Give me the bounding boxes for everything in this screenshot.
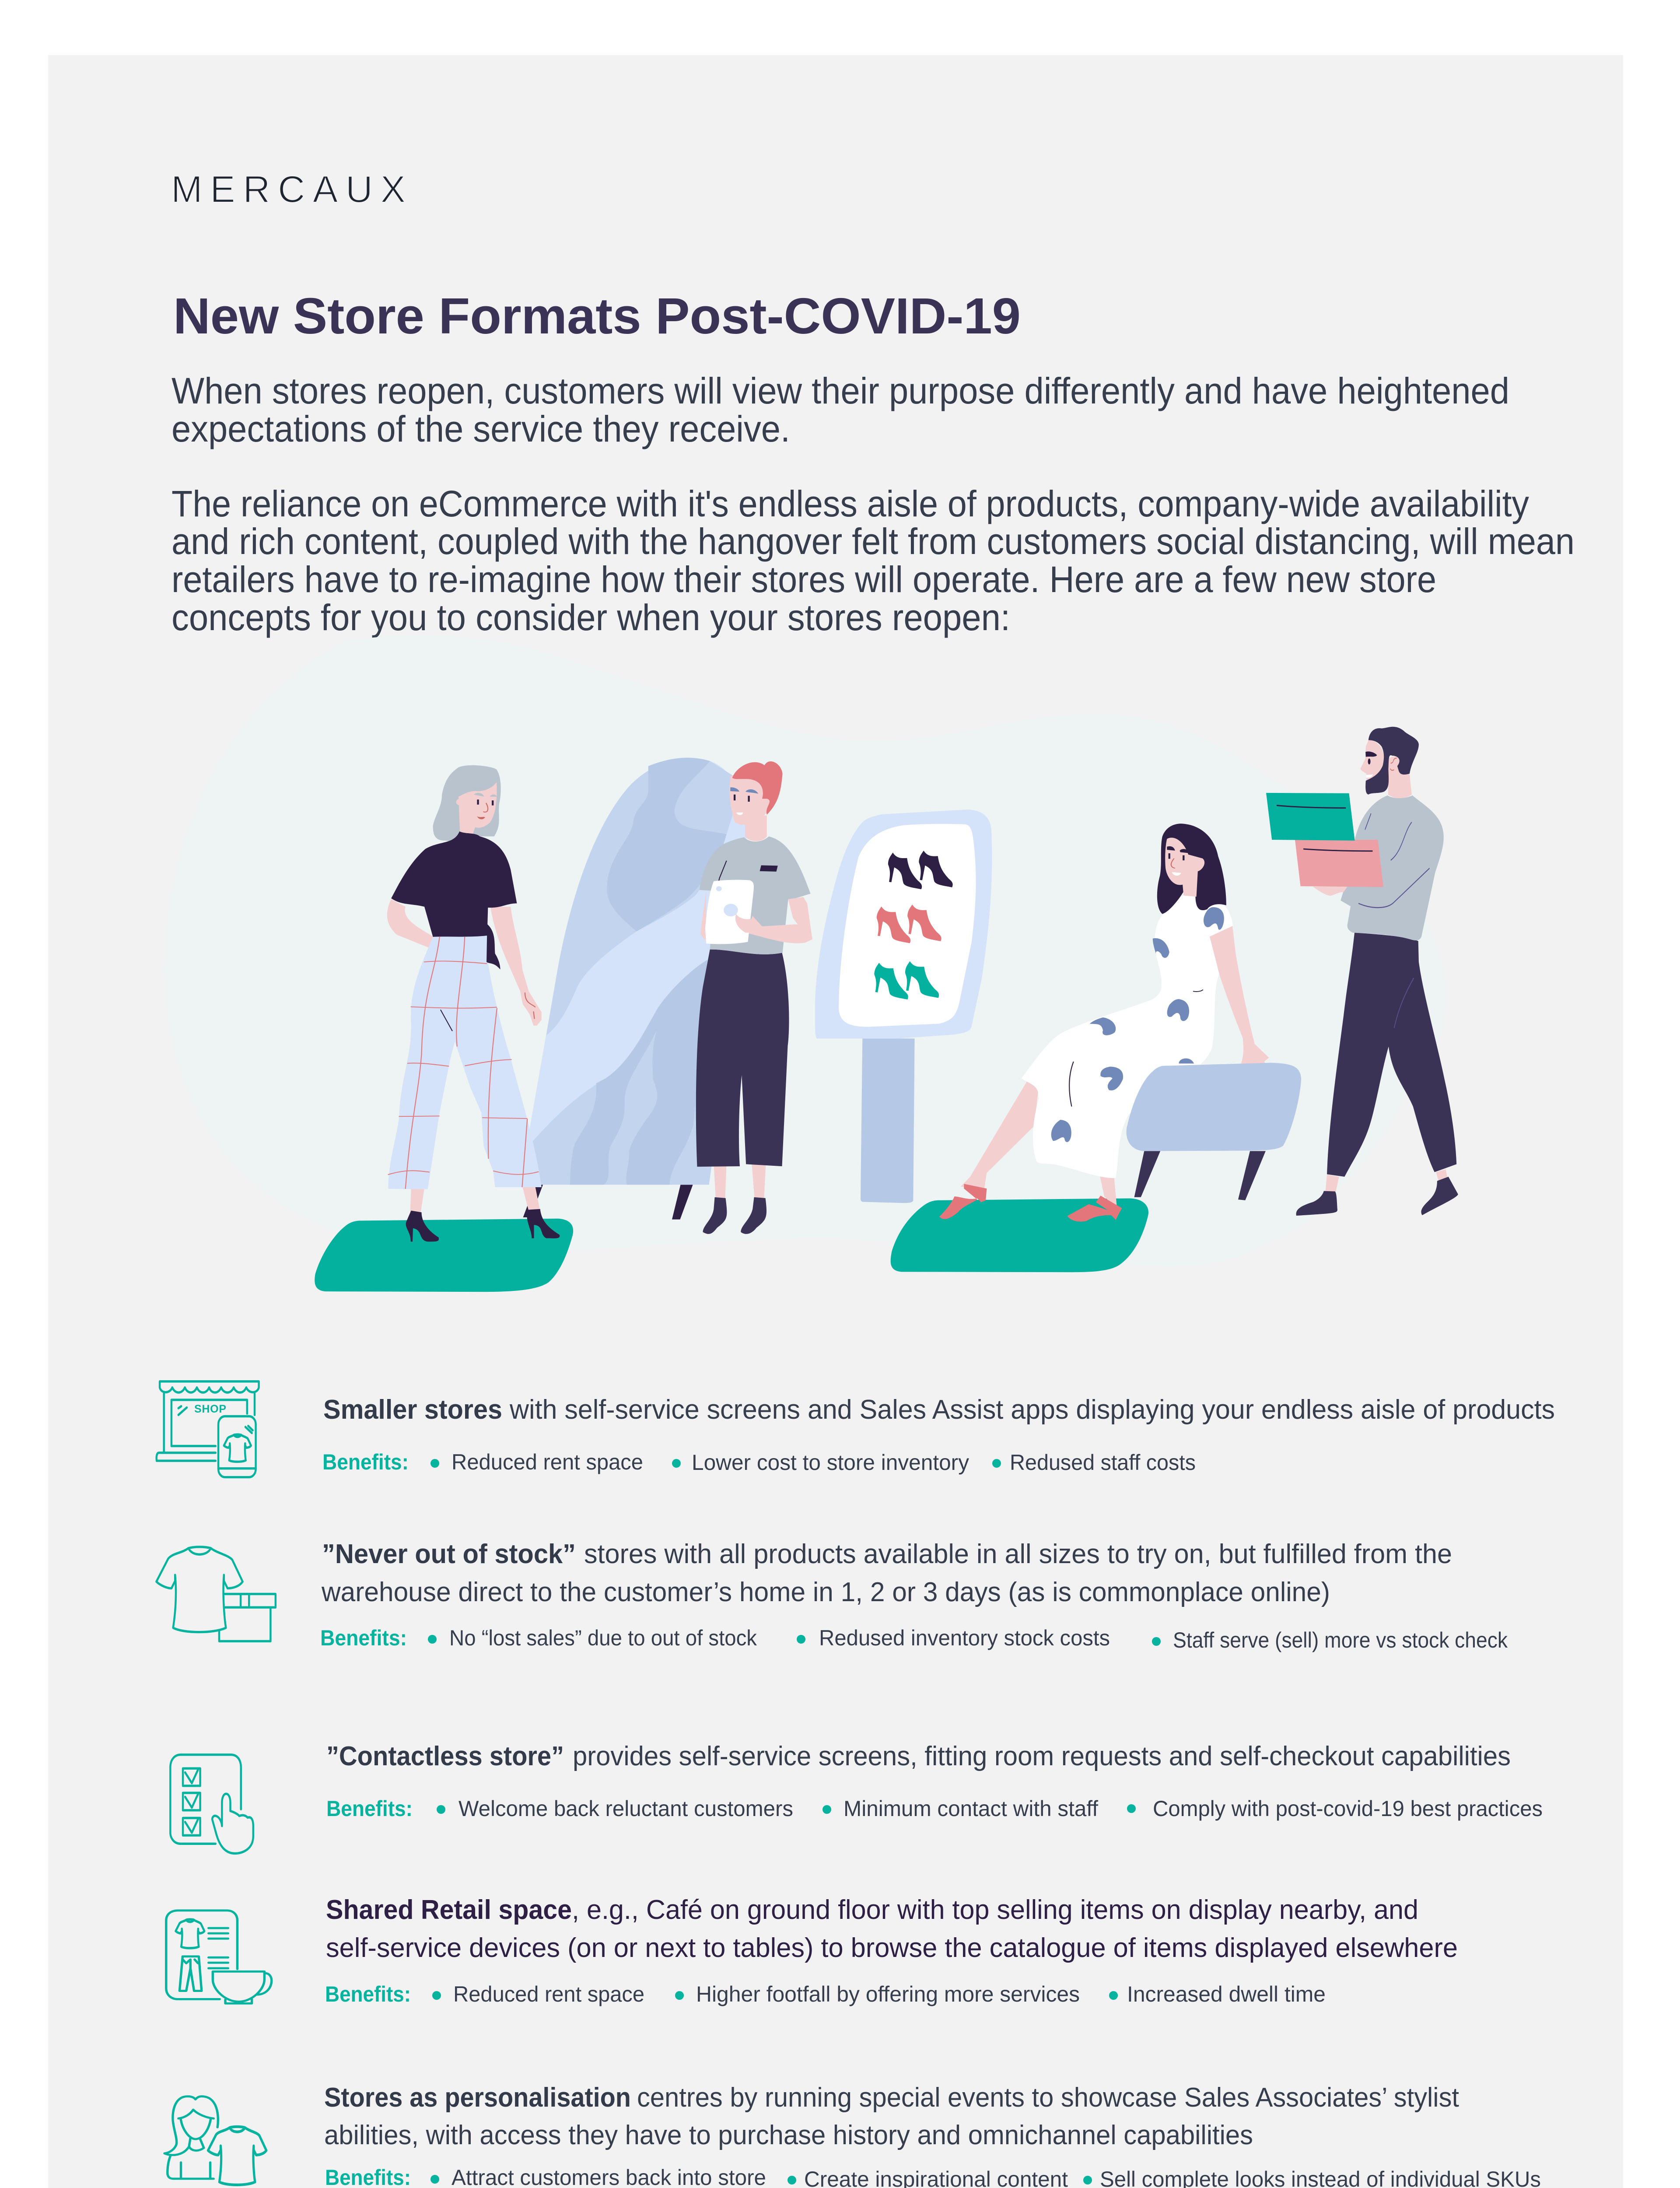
intro text block: and rich content, coupled with the hangover felt from customers social distancing, will mean — [172, 521, 1575, 562]
item 1 benefits: Benefits: — [322, 1450, 409, 1474]
stool — [1127, 1063, 1301, 1200]
item 1 benefits: Redused staff costs — [1010, 1450, 1196, 1475]
item 2 heading text — [321, 1539, 1452, 1607]
intro text block — [172, 370, 1575, 638]
icon: stylist and t-shirt — [164, 2097, 266, 2185]
icon label: SHOP: SHOP — [194, 1403, 226, 1415]
item 3 heading text: provides self-service screens, fitting room requests and self-checkout capabilities — [573, 1741, 1511, 1771]
item 2 heading text: warehouse direct to the customer’s home in 1, 2 or 3 days (as is commonplace online) — [321, 1577, 1330, 1607]
background blob — [164, 635, 1446, 1267]
illustration: store scene — [164, 635, 1458, 1292]
intro text block: The reliance on eCommerce with it's endless aisle of products, company-wide availability — [172, 483, 1529, 524]
sales assistant — [696, 761, 812, 1234]
item 5 heading text: centres by running special events to showcase Sales Associates’ stylist — [637, 2083, 1459, 2113]
item 1 benefits: Reduced rent space — [452, 1450, 643, 1474]
item 2 heading text: ”Never out of stock” — [322, 1539, 576, 1569]
item 3 benefits: Welcome back reluctant customers — [458, 1796, 793, 1821]
intro text block: retailers have to re-imagine how their stores will operate. Here are a few new store — [172, 559, 1436, 600]
item 3 benefits: Minimum contact with staff — [844, 1796, 1098, 1821]
left section: woman and assistant — [315, 757, 812, 1292]
item 4 benefits — [325, 1982, 1326, 2006]
mirror — [527, 757, 748, 1185]
item 4 heading text: , e.g., Café on ground floor with top selling items on display nearby, and — [572, 1895, 1418, 1925]
self-service screen — [815, 810, 992, 1203]
icon: t-shirt and box — [156, 1547, 276, 1641]
intro text block: When stores reopen, customers will view their purpose differently and have heightened — [172, 370, 1509, 411]
icon: catalogue and cup — [166, 1911, 272, 2003]
item 5 benefits — [325, 2165, 1541, 2188]
item 2 heading text: stores with all products available in all sizes to try on, but fulfilled from the — [584, 1539, 1452, 1569]
mirror stands — [523, 1185, 693, 1220]
floor mat left — [315, 1219, 573, 1292]
woman in checked trousers — [387, 765, 560, 1241]
item 3: contactless store — [170, 1741, 1543, 1853]
logo: Mercaux: MERCAUX — [171, 168, 406, 210]
item 4: shared retail space — [166, 1895, 1458, 2006]
item 1 heading text: with self-service screens and Sales Assist apps displaying your endless aisle of products — [509, 1395, 1555, 1425]
item 4 heading text: self-service devices (on or next to tables) to browse the catalogue of items displayed elsewhere — [326, 1933, 1458, 1963]
icon: checklist and hand — [170, 1755, 253, 1853]
item 4 heading text: Shared Retail space — [326, 1895, 572, 1925]
right section: screen, seated woman, stool — [815, 810, 1301, 1272]
item 4 benefits: Higher footfall by offering more services — [696, 1982, 1080, 2006]
item 3 benefits — [326, 1796, 1543, 1821]
item 5: stores as personalisation — [164, 2083, 1541, 2188]
item 2 benefits: No “lost sales” due to out of stock — [449, 1626, 757, 1650]
icon: shop and phone — [157, 1382, 259, 1477]
item 4 benefits: Reduced rent space — [453, 1982, 644, 2006]
item 2 benefits: Redused inventory stock costs — [819, 1626, 1110, 1650]
item 5 heading text: Stores as personalisation — [324, 2083, 631, 2113]
item 5 heading text: abilities, with access they have to purchase history and omnichannel capabilities — [324, 2120, 1253, 2150]
item 4 benefits: Benefits: — [325, 1982, 411, 2006]
item 5 heading text — [324, 2083, 1459, 2150]
item 4 benefits: Increased dwell time — [1127, 1982, 1326, 2006]
intro text block: concepts for you to consider when your stores reopen: — [172, 597, 1010, 638]
item 1: smaller stores — [157, 1382, 1555, 1477]
shoes on screen — [874, 851, 953, 999]
item 2 benefits: Staff serve (sell) more vs stock check — [1173, 1628, 1508, 1652]
floor mat right — [891, 1198, 1148, 1272]
seated woman — [939, 824, 1269, 1222]
item 2 benefits — [320, 1626, 1508, 1652]
item 3 benefits: Comply with post-covid-19 best practices — [1153, 1796, 1543, 1821]
item 3 benefits: Benefits: — [326, 1796, 413, 1821]
intro text block: expectations of the service they receive. — [172, 408, 790, 449]
item 3 heading text: ”Contactless store” — [326, 1741, 564, 1771]
item 4 heading text — [326, 1895, 1458, 1963]
item 2: never out of stock — [156, 1539, 1508, 1652]
title: New Store Formats Post-COVID-19 — [173, 288, 1021, 344]
item 1 benefits: Lower cost to store inventory — [692, 1450, 969, 1475]
man carrying boxes — [1266, 727, 1458, 1216]
item 2 benefits: Benefits: — [320, 1626, 407, 1650]
item 1 heading text: Smaller stores — [323, 1395, 502, 1425]
item 1 benefits — [322, 1450, 1196, 1475]
